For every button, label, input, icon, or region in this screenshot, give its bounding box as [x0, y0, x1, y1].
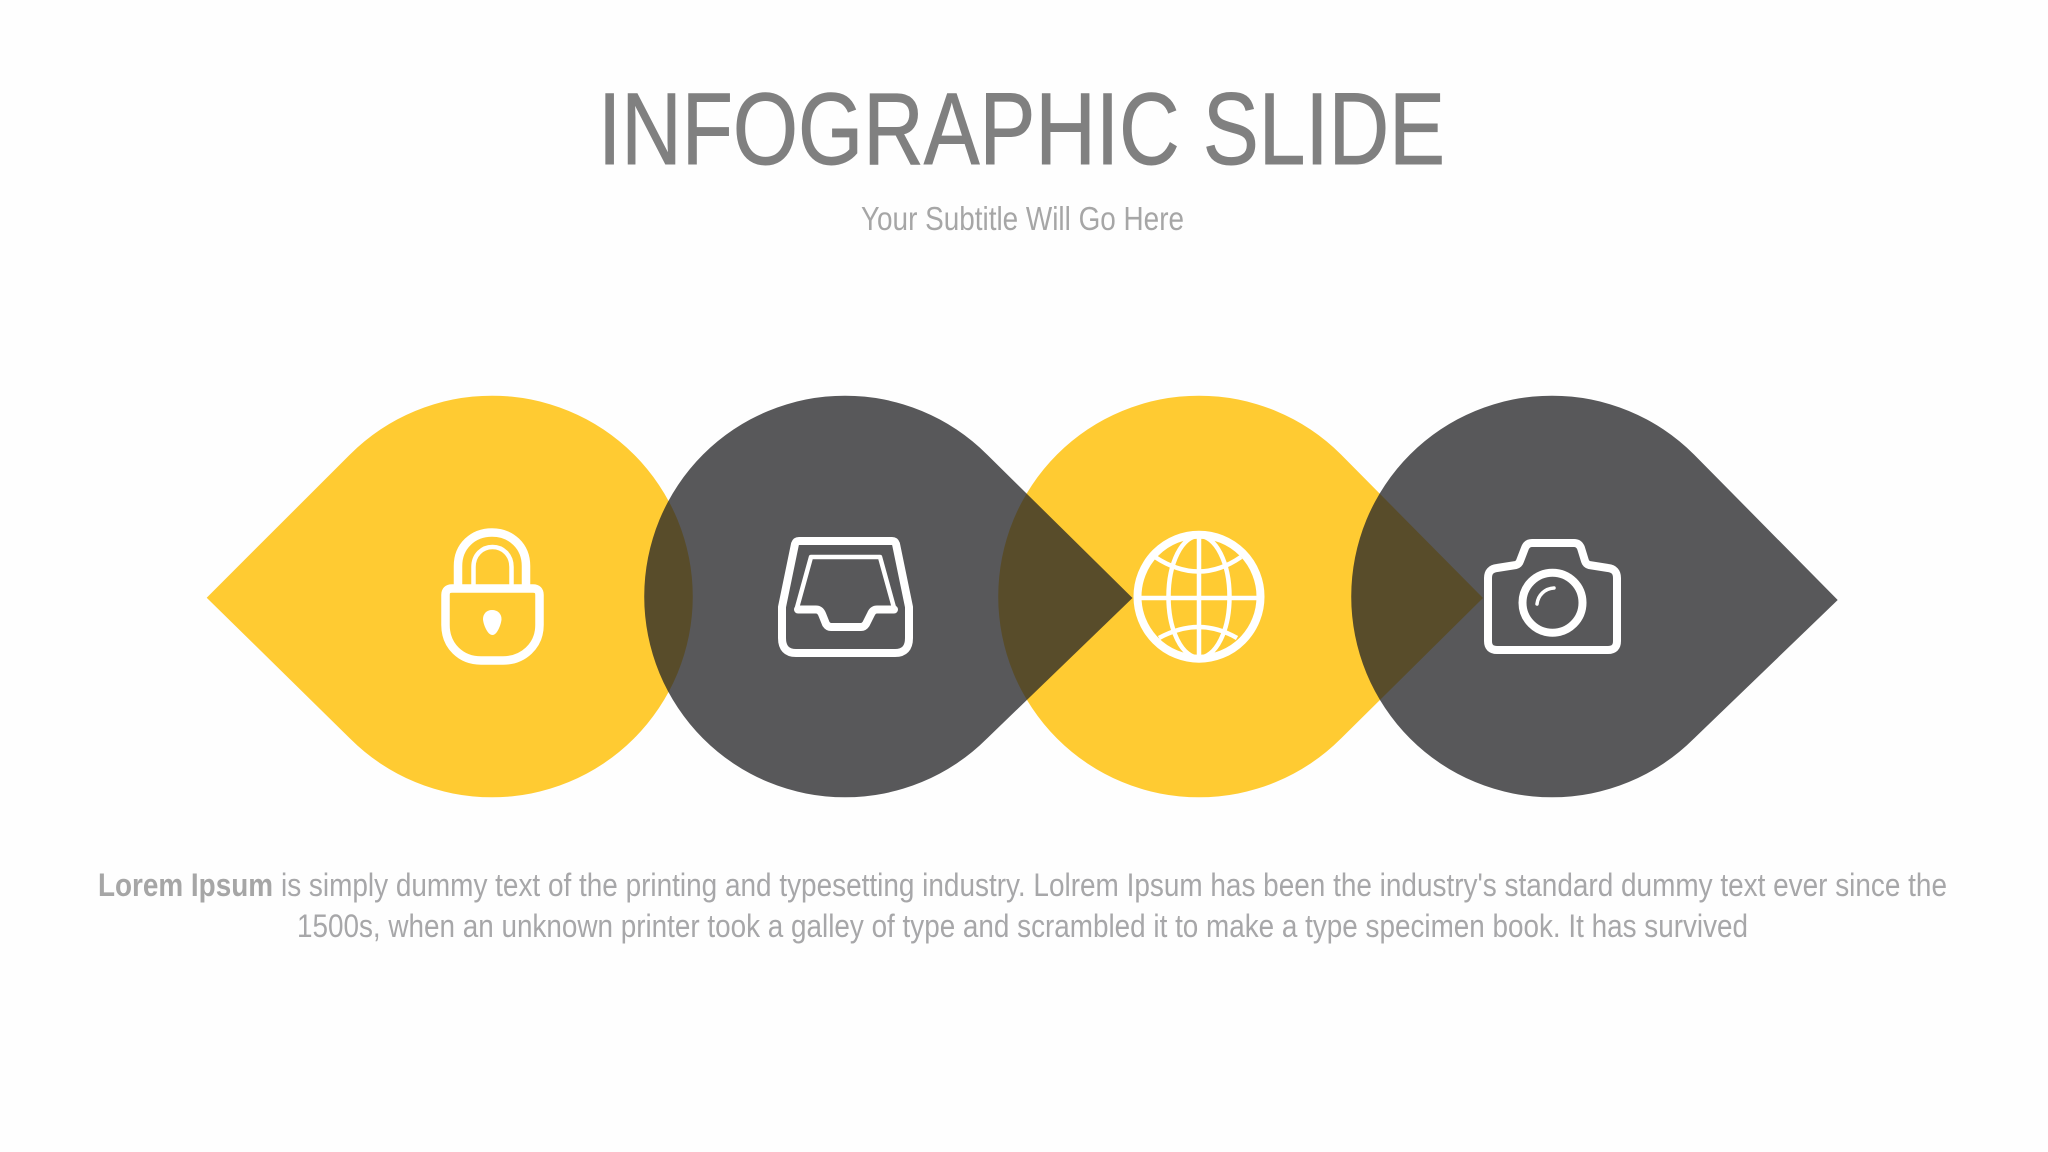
title: INFOGRAPHIC SLIDE [598, 72, 1445, 186]
chain of four drop shapes [207, 396, 1838, 797]
body line 1: bold lead-in: Lorem Ipsum [98, 867, 273, 903]
shape: dark drop 2, point right [644, 396, 1132, 797]
shape: dark drop 4, point right [1351, 396, 1838, 797]
shape: yellow drop 3, point right [998, 396, 1483, 797]
body text [98, 867, 1947, 944]
body line 2: 1500s, when an unknown printer took a galley of type and scrambled it to make a type specimen book. It has survived [297, 908, 1748, 944]
icon: globe [1138, 535, 1260, 659]
shape: yellow drop 1, point left [207, 396, 693, 797]
icon: inbox tray [782, 541, 909, 653]
icon: padlock [446, 532, 540, 660]
icon: camera [1488, 543, 1617, 650]
subtitle: Your Subtitle Will Go Here [861, 201, 1184, 238]
